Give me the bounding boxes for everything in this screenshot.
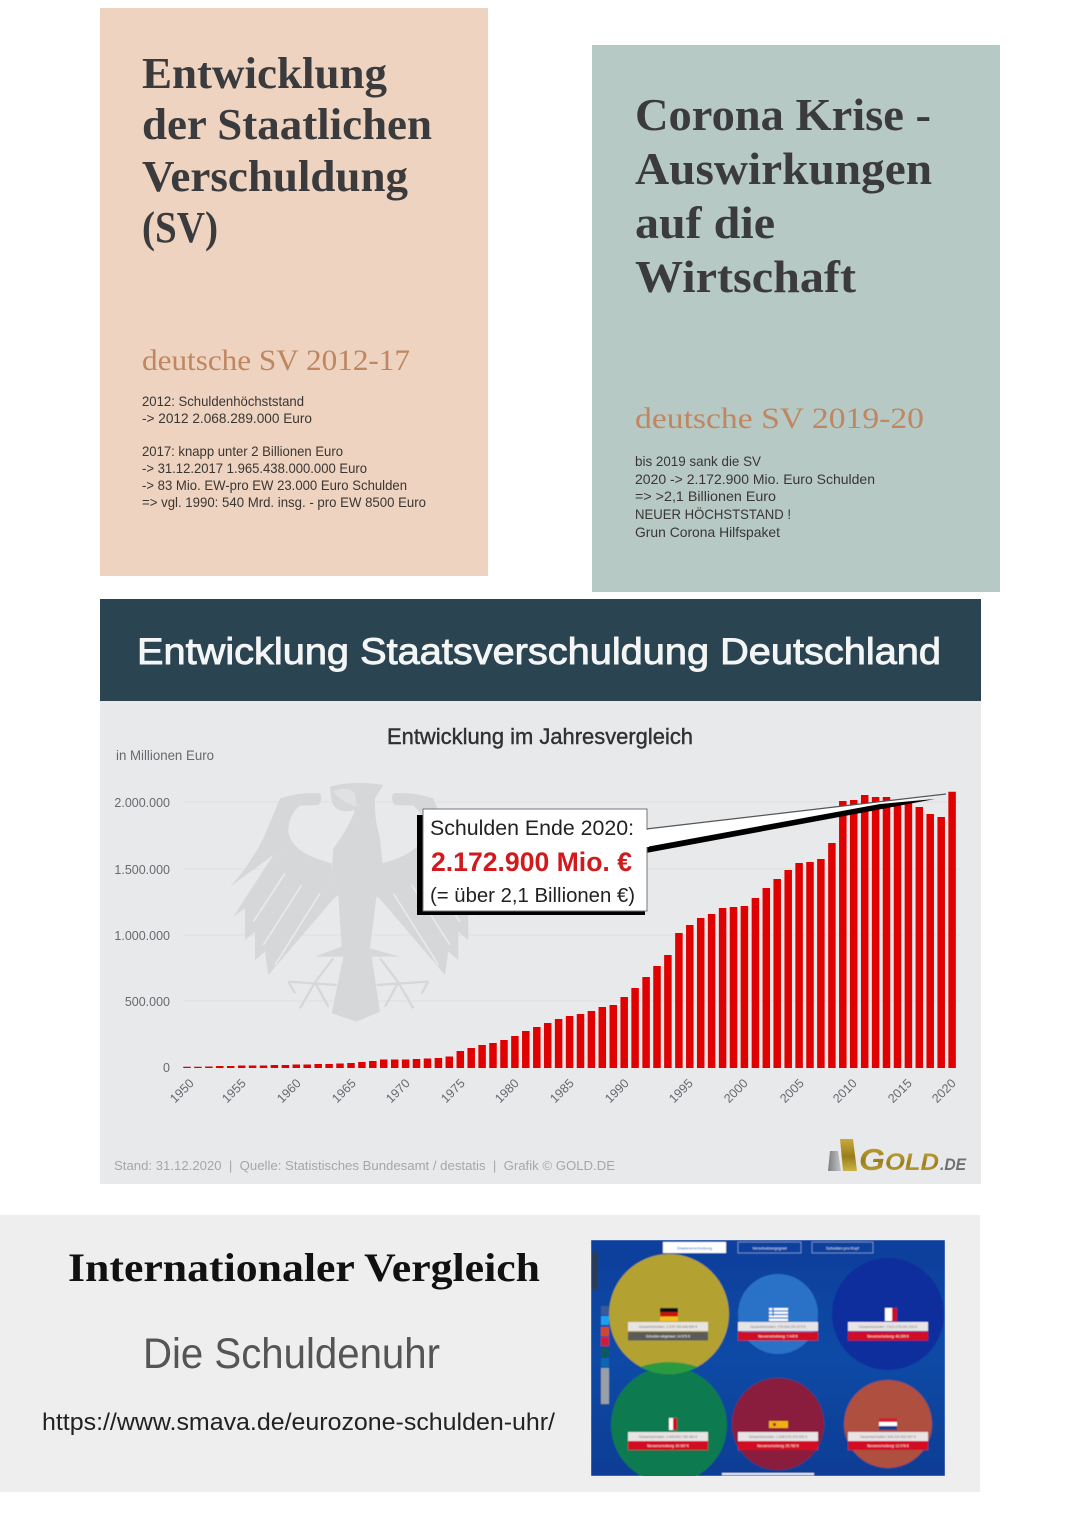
panel: Internationaler Vergleich	[0, 1215, 980, 1492]
heading: Corona Krise - Auswirkungen auf die Wirtschaft: Corona Krise -	[635, 89, 931, 140]
tabs	[663, 1242, 873, 1253]
circle: Griechenland	[738, 1274, 818, 1354]
x axis labels: 1950	[167, 1076, 197, 1106]
x axis labels: 1960	[274, 1076, 304, 1106]
logo: GOLD.DE: .DE	[940, 1155, 967, 1174]
text block: SV 2019 und 2020: NEUER HÖCHSTSTAND !	[635, 505, 791, 522]
circle: Niederlande	[844, 1380, 932, 1468]
x axis labels: 2000	[721, 1076, 751, 1106]
heading: Internationaler Vergleich: Internationaler Vergleich	[68, 1245, 540, 1290]
x axis labels	[167, 1076, 959, 1106]
chart subtitle: Entwicklung im Jahresvergleich	[387, 724, 693, 749]
x axis labels: 1995	[666, 1076, 696, 1106]
logo: GOLD.DE	[828, 1139, 967, 1177]
callout: Schulden Ende 2020	[417, 794, 946, 915]
text block: SV 2019 und 2020: Grun Corona Hilfspaket	[635, 524, 780, 540]
data labels: Neuverschuldung: 7.449 €	[758, 1334, 798, 1338]
tabs: Verschuldungsgrad	[752, 1246, 787, 1250]
y axis labels: 1.000.000	[114, 929, 170, 943]
heading: Corona Krise - Auswirkungen auf die Wirtschaft: Auswirkungen	[635, 143, 932, 194]
bar chart: Schulden 1950-2020	[187, 792, 952, 1068]
text block: SV 2012 und 2017: -> 2012 2.068.289.000 Euro	[142, 410, 312, 426]
link: https://www.smava.de/eurozone-schulden-uhr/	[42, 1409, 555, 1436]
text block: SV 2019 und 2020: 2020 -> 2.172.900 Mio. Euro Schulden	[635, 471, 875, 487]
text block: SV 2012 und 2017: 2012: Schuldenhöchststand	[142, 393, 304, 409]
data labels: Gesamtschulden: 378.634.291.873 €	[750, 1325, 806, 1329]
heading: Corona Krise - Auswirkungen auf die Wirtschaft	[635, 89, 932, 302]
icon: Bundesadler watermark	[230, 783, 483, 1022]
chart header	[100, 599, 981, 701]
flags	[660, 1308, 897, 1430]
x axis labels: 2005	[777, 1076, 807, 1106]
text block: SV 2019 und 2020: => >2,1 Billionen Euro	[635, 488, 776, 504]
callout: Schulden Ende 2020: (= über 2,1 Billionen €)	[430, 885, 635, 907]
text block: SV 2012 und 2017: => vgl. 1990: 540 Mrd. insg. - pro EW 8500 Euro	[142, 494, 426, 510]
data labels: Gesamtschulden: 1.308.075.370.053 €	[749, 1435, 807, 1439]
subheading: deutsche SV 2019-20: deutsche SV 2019-20	[635, 402, 924, 435]
heading: Entwicklung der Staatlichen Verschuldung: Verschuldung	[142, 152, 408, 201]
x axis labels: 2020	[929, 1076, 959, 1106]
panel: chart Entwicklung Staatsverschuldung Deutschland	[100, 599, 981, 1184]
data labels: Neuverschuldung: 30.087 €	[647, 1444, 689, 1448]
circle: Italien	[611, 1367, 727, 1483]
screenshot: Schuldenuhr	[591, 1240, 945, 1483]
heading: Entwicklung der Staatlichen Verschuldung: Entwicklung	[142, 49, 387, 98]
logo: GOLD.DE: OLD	[885, 1149, 939, 1176]
text block: SV 2012 und 2017	[142, 393, 426, 510]
heading: Entwicklung der Staatlichen Verschuldung: (SV)	[142, 203, 218, 252]
x axis labels: 1980	[492, 1076, 522, 1106]
data labels	[628, 1322, 928, 1450]
data labels: Neuverschuldung: 46.395 €	[867, 1334, 909, 1338]
data labels: Gesamtschulden: 2.512.278.041.153 €	[859, 1325, 917, 1329]
subheading: deutsche SV 2012-17: deutsche SV 2012-17	[142, 344, 410, 377]
source line: Stand: 31.12.2020 | Quelle: Statistisches Bundesamt / destatis | Grafik © GOLD.DE	[114, 1158, 615, 1173]
data labels: Neuverschuldung: 12.076 €	[867, 1444, 909, 1448]
text block: SV 2019 und 2020: bis 2019 sank die SV	[635, 453, 762, 469]
x axis labels: 2010	[830, 1076, 860, 1106]
x axis labels: 1955	[219, 1076, 249, 1106]
y axis unit: in Millionen Euro	[116, 748, 214, 763]
x axis labels: 1965	[329, 1076, 359, 1106]
x axis labels: 1990	[602, 1076, 632, 1106]
data labels: Gesamtschulden: 545.224.902.997 €	[860, 1435, 916, 1439]
y axis labels: 500.000	[125, 995, 170, 1009]
sidebar icons	[592, 1252, 609, 1404]
x axis labels: 1975	[438, 1076, 468, 1106]
y axis labels: 1.500.000	[114, 863, 170, 877]
data labels: Schulden abgebaut: 14.575 €	[646, 1334, 690, 1338]
subheading: Die Schuldenuhr: Die Schuldenuhr	[143, 1330, 440, 1378]
text block: SV 2019 und 2020	[635, 453, 875, 540]
x axis labels: 1985	[547, 1076, 577, 1106]
data labels: Gesamtschulden: 2.376.769.648.869 €	[639, 1325, 697, 1329]
circle: Frankreich	[832, 1258, 944, 1370]
tabs: Schulden pro Kopf	[826, 1246, 860, 1250]
panel: Corona Krise	[592, 45, 1000, 592]
x axis labels: 2015	[885, 1076, 915, 1106]
text block: SV 2012 und 2017: 2017: knapp unter 2 Billionen Euro	[142, 443, 343, 459]
heading: Corona Krise - Auswirkungen auf die Wirtschaft: Wirtschaft	[635, 251, 857, 302]
y axis labels: 0	[163, 1061, 170, 1075]
heading: Entwicklung der Staatlichen Verschuldung	[142, 49, 432, 252]
text block: SV 2012 und 2017: -> 83 Mio. EW-pro EW 23.000 Euro Schulden	[142, 477, 407, 493]
circle: Deutschland	[609, 1254, 729, 1374]
data labels: Gesamtschulden: 2.469.502.785.383 €	[639, 1435, 697, 1439]
panel: Entwicklung der Staatlichen Verschuldung	[100, 8, 488, 576]
data labels: Neuverschuldung: 25.782 €	[757, 1444, 799, 1448]
circle: Spanien	[732, 1378, 824, 1470]
heading: Entwicklung der Staatlichen Verschuldung: der Staatlichen	[142, 100, 432, 149]
logo: GOLD.DE: G	[859, 1142, 885, 1177]
chart header: Entwicklung Staatsverschuldung Deutschland	[137, 631, 941, 672]
x axis labels: 1970	[383, 1076, 413, 1106]
tabs: Staatsverschuldung	[677, 1246, 712, 1250]
text block: SV 2012 und 2017: -> 31.12.2017 1.965.438.000.000 Euro	[142, 460, 367, 476]
y axis labels: 2.000.000	[114, 796, 170, 810]
callout: Schulden Ende 2020: Schulden Ende 2020:	[430, 816, 634, 840]
heading: Corona Krise - Auswirkungen auf die Wirtschaft: auf die	[635, 197, 775, 248]
callout: Schulden Ende 2020: 2.172.900 Mio. €	[431, 847, 632, 877]
y axis labels	[114, 796, 170, 1075]
